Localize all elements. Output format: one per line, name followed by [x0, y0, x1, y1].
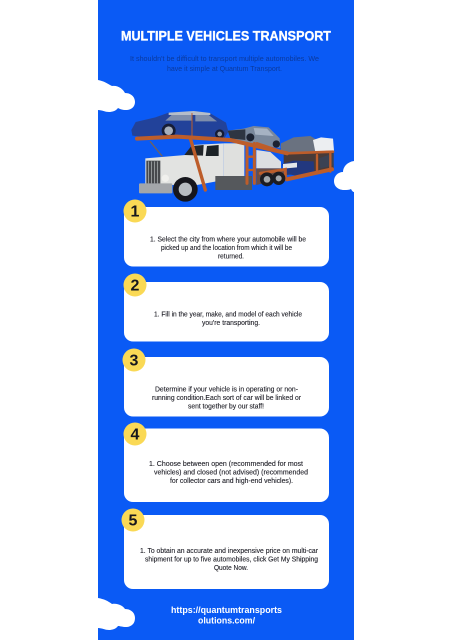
- website link: olutions.com/: [198, 616, 255, 626]
- step 4 card: for collector cars and high-end vehicles).: [170, 478, 293, 485]
- step 3 card: Determine if your vehicle is in operating or non-: [155, 386, 299, 394]
- step 1 card: returned.: [218, 254, 244, 260]
- website link: [171, 605, 282, 626]
- step 3 card: sent together by our staff!: [188, 404, 264, 410]
- rear cars: [281, 136, 334, 176]
- step 3 card: running condition.Each sort of car will be linked or: [152, 395, 302, 402]
- intro text: [130, 54, 319, 73]
- step 1 card: 1: [131, 204, 140, 220]
- step 1 card: picked up and the location from which it will be: [161, 245, 292, 252]
- step 4 card: 4: [131, 426, 140, 444]
- step 4 card: [124, 422, 329, 502]
- truck cab: [139, 143, 284, 193]
- step 2 card: 1. Fill in the year, make, and model of each vehicle: [154, 312, 302, 318]
- background panel: [98, 0, 354, 640]
- step 3 card: [122, 348, 329, 416]
- intro text: It shouldn't be difficult to transport multiple automobiles. We: [130, 54, 319, 63]
- step 5 card: shipment for up to five automobiles, click Get My Shipping: [145, 556, 318, 564]
- step 2 card: [124, 274, 329, 342]
- cloud: right: [334, 161, 354, 192]
- step 2 card: you're transporting.: [202, 320, 260, 327]
- website link: https://quantumtransports: [171, 605, 282, 616]
- step 5 card: 1. To obtain an accurate and inexpensive price on multi-car: [140, 548, 319, 555]
- step 1 card: [124, 200, 329, 266]
- step 3 card: 3: [130, 352, 139, 370]
- step 4 card: vehicles) and closed (not advised) (recommended: [154, 470, 308, 476]
- intro text: have it simple at Quantum Transport.: [167, 64, 282, 73]
- orange car carrier frame: [137, 113, 333, 190]
- title: MULTIPLE VEHICLES TRANSPORT: [121, 28, 332, 44]
- step 2 card: 2: [131, 278, 140, 294]
- step 1 card: 1. Select the city from where your automobile will be: [150, 236, 306, 244]
- step 5 card: 5: [129, 512, 138, 530]
- top blue car: [131, 111, 228, 139]
- step 5 card: [122, 508, 329, 589]
- step 5 card: Quote Now.: [214, 565, 248, 572]
- cloud: bottom left: [98, 598, 135, 630]
- truck wheels: [173, 172, 285, 202]
- step 4 card: 1. Choose between open (recommended for most: [149, 461, 303, 468]
- second grey car: [228, 126, 280, 148]
- cloud: top left: [98, 80, 135, 112]
- truck carrying cars: [131, 111, 334, 202]
